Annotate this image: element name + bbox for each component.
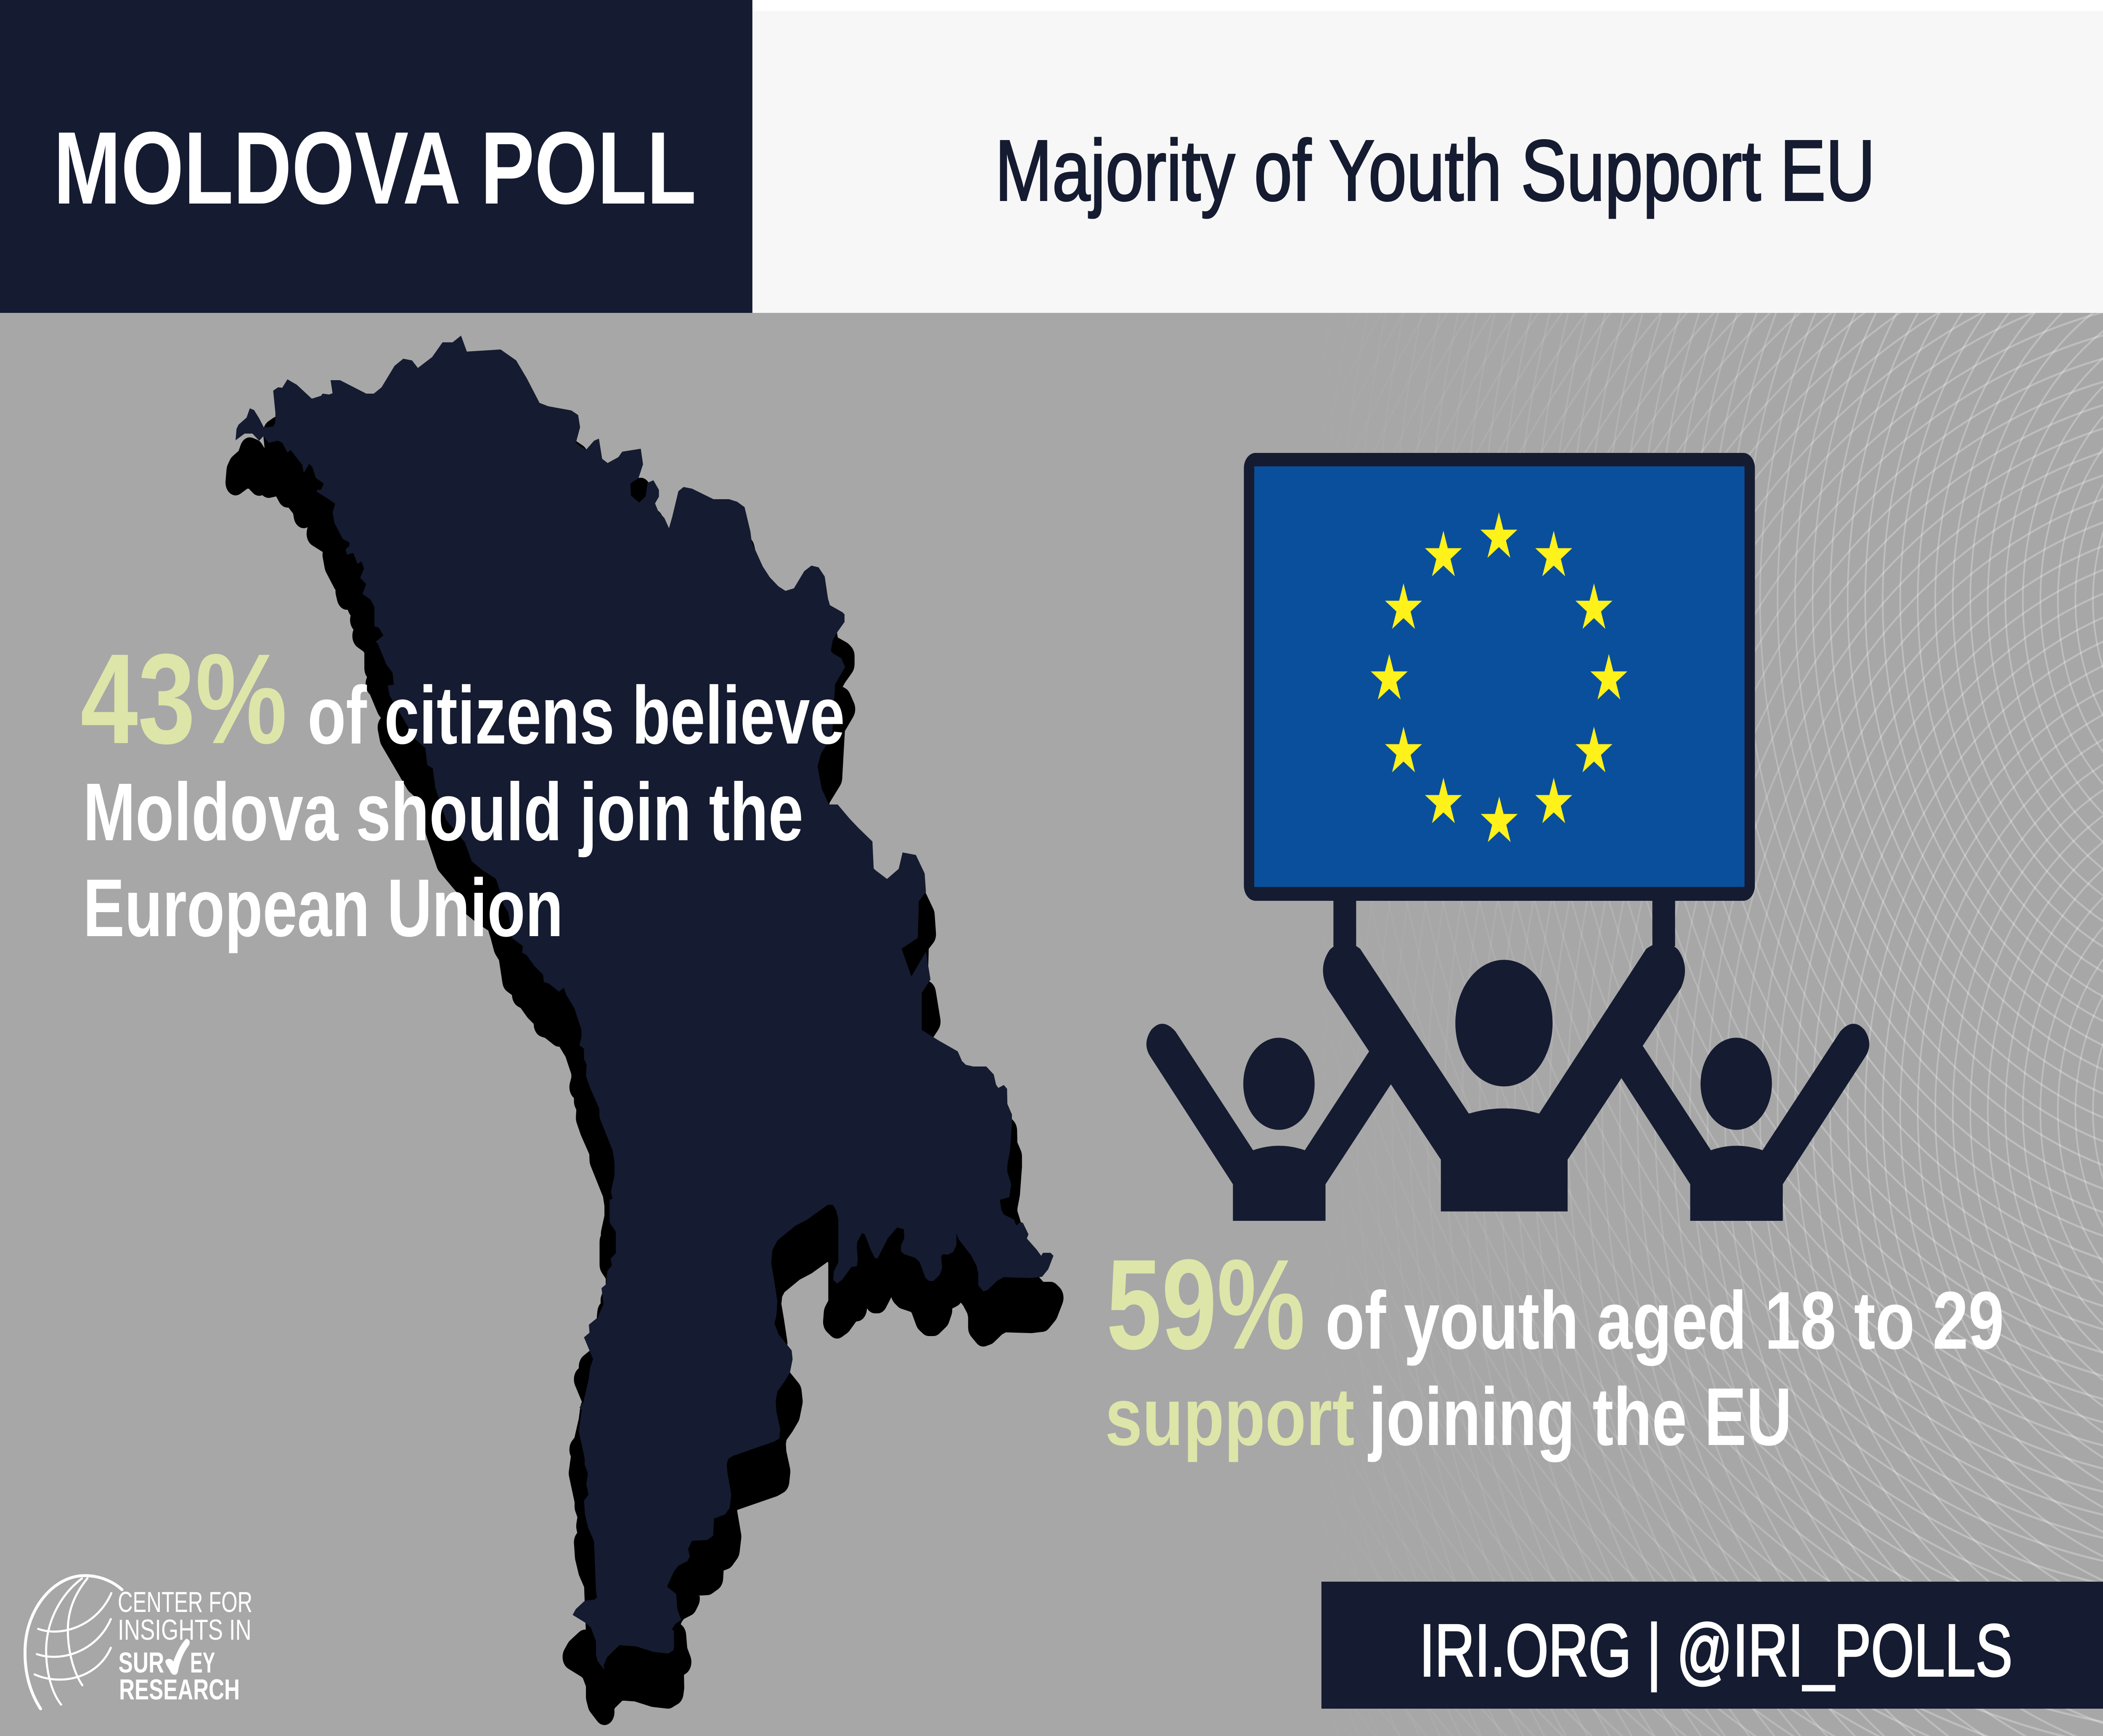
logo text — [118, 1586, 252, 1706]
header band — [0, 0, 2103, 313]
flag field — [1254, 466, 1745, 887]
logo text: EY — [190, 1646, 215, 1679]
EU flag sign — [1244, 453, 1755, 946]
text block: 43% of citizens: European Union — [83, 862, 563, 953]
text block: 43% of citizens — [80, 627, 845, 953]
sign posts — [1333, 896, 1675, 946]
text block: 43% of citizens: Moldova should join the — [83, 766, 803, 857]
icon: three people raising arms — [1147, 942, 1869, 1221]
stat 43%: 43% — [80, 627, 287, 770]
icon: globe — [25, 1576, 122, 1709]
footer bar — [1322, 1582, 2103, 1709]
text block: 59% of youth: of youth aged 18 to 29 — [1325, 1274, 2004, 1366]
text block: 43% of citizens: of citizens believe — [307, 669, 845, 761]
flag frame — [1244, 453, 1755, 901]
centre person — [1323, 942, 1685, 1212]
logo text: CENTER FOR — [118, 1586, 252, 1619]
logo text: INSIGHTS IN — [118, 1614, 252, 1646]
map of Moldova — [236, 336, 1054, 1712]
header title panel — [0, 0, 752, 313]
subtitle: Majority of Youth Support EU — [995, 122, 1875, 219]
text block: 59% of youth — [1105, 1232, 2004, 1462]
map shadow — [236, 378, 1054, 1712]
flag stars — [1371, 512, 1627, 842]
background line pattern — [1441, 313, 2103, 1736]
right person — [1621, 1024, 1869, 1221]
header subtitle panel — [752, 0, 2103, 313]
left person — [1147, 1024, 1391, 1221]
logo: Center for Insights in Survey Research — [25, 1576, 252, 1709]
title: MOLDOVA POLL — [53, 111, 696, 226]
text block: 59% of youth: support — [1105, 1371, 1354, 1462]
icon: check mark — [165, 1639, 190, 1675]
stat 59%: 59% — [1106, 1232, 1305, 1376]
logo text: SUR — [119, 1646, 164, 1679]
footer link text: IRI.ORG | @IRI_POLLS — [1420, 1609, 2013, 1692]
logo text: RESEARCH — [119, 1673, 240, 1706]
text block: 59% of youth: joining the EU — [1368, 1371, 1792, 1462]
map shape — [236, 336, 1054, 1670]
